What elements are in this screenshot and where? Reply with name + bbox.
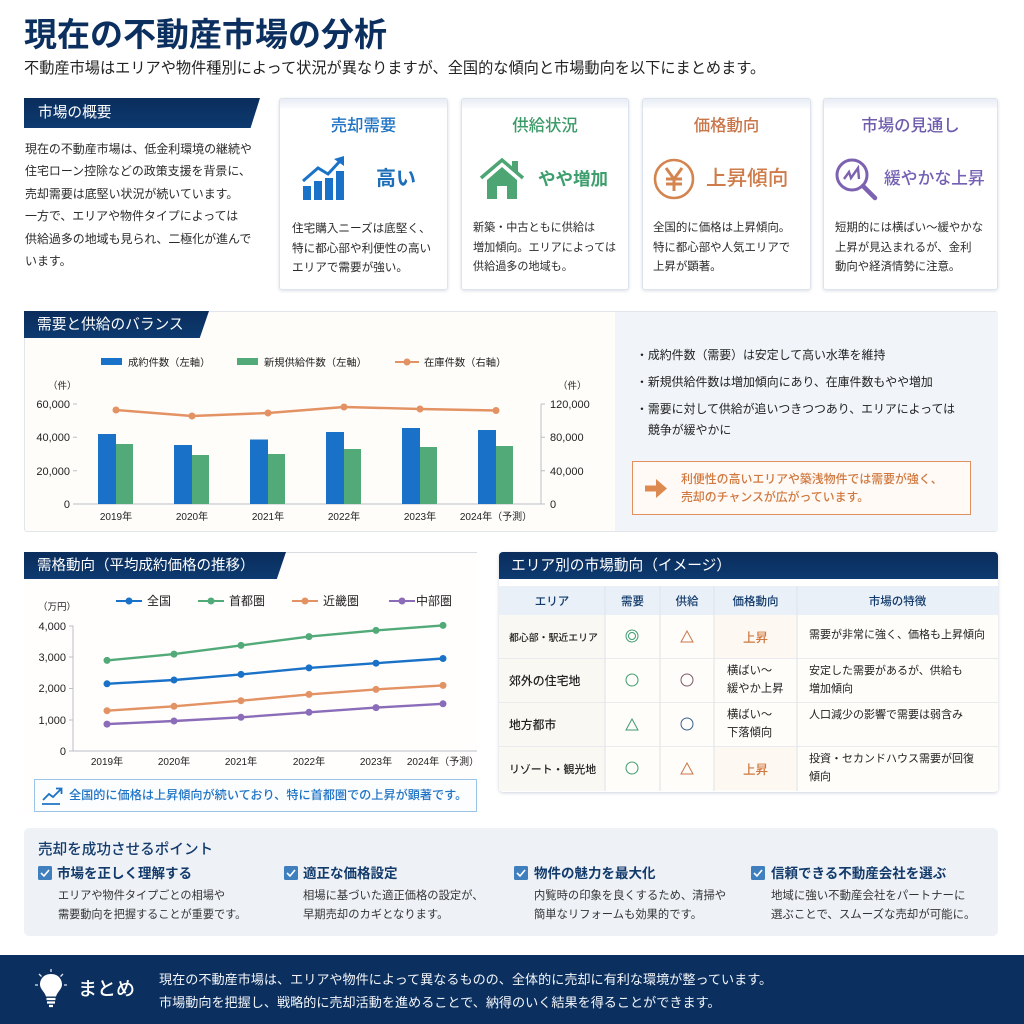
table row: resorts [509, 752, 974, 783]
table header row: 価格動向 [732, 596, 778, 608]
axis labels: 4,000 [38, 621, 66, 633]
table body tint [499, 615, 998, 791]
point: reliable agent [751, 866, 976, 920]
icon: arrow [645, 479, 667, 498]
axis labels: 20,000 [36, 466, 70, 478]
heading: area table [499, 552, 998, 579]
icon: checkbox [514, 866, 528, 880]
text: market overview body: 現在の不動産市場は、低金利環境の継続や [25, 142, 252, 156]
callout text [681, 472, 943, 504]
card body: 短期的には横ばい～緩やかな [835, 222, 983, 234]
table column lines [604, 586, 798, 791]
axis labels: （件） [558, 380, 587, 392]
card: price trend [642, 98, 811, 290]
legend: 成約件数（左軸） [128, 356, 210, 369]
axis labels: 3,000 [38, 652, 66, 664]
legend: 近畿圏 [323, 594, 359, 608]
panel: price trend chart [24, 552, 477, 813]
chart: average price lines: 2020年 [158, 755, 190, 768]
icon: checkbox [38, 866, 52, 880]
axis labels: 120,000 [550, 399, 590, 411]
heading: demand and supply [24, 311, 209, 338]
card body [653, 221, 790, 273]
axes and ticks [73, 404, 545, 504]
callout: selling opportunity [632, 461, 971, 515]
point: reliable agent: 選ぶことで、スムーズな売却が可能に。 [771, 908, 976, 920]
bullet list: ・需要に対して供給が追いつきつつあり、エリアによっては [636, 402, 955, 416]
legend: 全国 [147, 594, 171, 608]
summary text: 現在の不動産市場は、エリアや物件によって異なるものの、全体的に売却に有利な環境が整っています。 [159, 972, 772, 987]
point: maximize appeal: 物件の魅力を最大化 [534, 866, 656, 881]
bars: closed deals [98, 428, 496, 504]
card body [835, 221, 983, 273]
axis labels: 80,000 [550, 432, 584, 444]
table row: city center [499, 615, 998, 659]
value: rising: 上昇傾向 [706, 167, 788, 190]
panel: summary footer [0, 955, 1024, 1024]
table row: regional cities: 下落傾向 [727, 727, 772, 739]
symbol: triangle [625, 718, 639, 730]
table row: suburbs: 安定した需要があるが、供給も [809, 665, 963, 677]
line: inventory [112, 404, 500, 420]
axis labels: （万円） [38, 601, 76, 613]
card: supply [461, 98, 629, 290]
card title: 供給状況 [512, 117, 578, 135]
card body: 住宅購入ニーズは底堅く、 [292, 222, 431, 235]
value: slightly increasing: やや増加 [538, 169, 608, 189]
table row: regional cities: 地方都市 [509, 718, 556, 732]
heading: summary: まとめ [78, 979, 135, 1000]
summary text: 市場動向を把握し、戦略的に売却活動を進めることで、納得のいく結果を得ることができます。 [159, 995, 720, 1010]
table header row: 市場の特徴 [869, 596, 926, 608]
table row: city center: 都心部・駅近エリア [509, 632, 598, 644]
chart: average price lines: 2022年 [293, 755, 325, 768]
icon: light bulb [35, 969, 67, 1008]
heading: selling points: 売却を成功させるポイント [38, 842, 213, 858]
symbol: circle [680, 718, 694, 730]
legend [101, 356, 506, 369]
axis labels: （件） [48, 380, 77, 392]
panel: area market table [499, 552, 998, 792]
heading: market overview [24, 98, 260, 128]
axis labels [38, 601, 76, 758]
text: market overview body: 売却需要は底堅い状況が続いています。 [25, 187, 238, 201]
point: maximize appeal: 内覧時の印象を良くするため、清掃や [534, 890, 726, 902]
table row: resorts: 投資・セカンドハウス需要が回復 [809, 753, 974, 765]
point: appropriate pricing: 適正な価格設定 [303, 866, 398, 881]
icon: magnifier with chart [836, 158, 878, 200]
table row: suburbs: 郊外の住宅地 [509, 674, 580, 688]
heading: demand and supply: 需要と供給のバランス [37, 317, 184, 333]
point: appropriate pricing [284, 866, 484, 920]
table row: suburbs [499, 659, 998, 703]
bullet list: 競争が緩やかに [648, 423, 731, 437]
axis labels: 0 [550, 499, 556, 511]
icon: checkbox [284, 866, 298, 880]
chart: demand and supply bars with inventory line: 2024年（予測） [460, 510, 532, 523]
text: market overview body: 一方で、エリアや物件タイプによっては [25, 209, 238, 223]
table row: resorts: 上昇 [743, 763, 768, 777]
bullet list: ・新規供給件数は増加傾向にあり、在庫件数もやや増加 [636, 374, 933, 388]
legend: 在庫件数（右軸） [424, 356, 506, 369]
subtitle: 不動産市場はエリアや物件種別によって状況が異なりますが、全国的な傾向と市場動向を以下にまとめます。 [24, 60, 765, 77]
table row: regional cities [499, 703, 998, 747]
callout text: 利便性の高いエリアや築浅物件では需要が強く、 [681, 472, 943, 486]
point: reliable agent: 信頼できる不動産会社を選ぶ [771, 866, 946, 881]
icon: checkbox [751, 866, 765, 880]
text: market overview body: 供給過多の地域も見られ、二極化が進んで [25, 232, 251, 246]
table row: city center: 需要が非常に強く、価格も上昇傾向 [809, 629, 985, 641]
line: chubu [104, 700, 446, 728]
card body: 上昇が顕著。 [653, 261, 722, 273]
card body: 上昇が見込まれるが、金利 [835, 242, 971, 254]
table row: regional cities: 人口減少の影響で需要は弱含み [809, 709, 963, 721]
axis labels [36, 380, 590, 511]
symbol: double circle [626, 630, 638, 642]
card body: 新築・中古ともに供給は [473, 222, 595, 234]
table row: resorts: 傾向 [809, 771, 831, 783]
axis labels: 40,000 [550, 466, 584, 478]
symbol: circle [680, 674, 694, 686]
symbol: triangle [680, 762, 694, 774]
chart: average price lines: 2021年 [225, 755, 257, 768]
table row: suburbs: 増加傾向 [809, 683, 853, 695]
point: appropriate pricing: 相場に基づいた適正価格の設定が、 [303, 890, 484, 902]
card title: 価格動向 [694, 117, 759, 135]
summary text [159, 972, 772, 1010]
chart: average price lines: 2019年 [91, 755, 123, 768]
card title: 市場の見通し [861, 117, 960, 135]
table header row: 供給 [676, 596, 698, 608]
callout text: 全国的に価格は上昇傾向が続いており、特に首都圏での上昇が顕著です。 [69, 788, 467, 802]
icon: rising bar chart [302, 156, 344, 200]
card body: 特に都心部や人気エリアで [653, 242, 790, 254]
panel: selling points background [24, 828, 998, 936]
legend [116, 593, 452, 608]
first column shading [499, 615, 605, 791]
right summary background [615, 312, 998, 531]
point: understand the market: 市場を正しく理解する [57, 866, 192, 881]
point: appropriate pricing: 早期売却のカギとなります。 [303, 908, 448, 920]
table row: city center: 上昇 [743, 631, 768, 645]
point: maximize appeal: 簡単なリフォームも効果的です。 [534, 908, 702, 920]
table row: regional cities: 横ばい～ [727, 709, 772, 721]
point: reliable agent: 地域に強い不動産会社をパートナーに [771, 890, 965, 902]
heading: price trend [24, 552, 286, 579]
title: 現在の不動産市場の分析 [24, 16, 387, 53]
axis labels: 0 [64, 499, 70, 511]
chart: average price lines: 2023年 [360, 755, 392, 768]
icon: house [480, 158, 524, 199]
legend: 中部圏 [416, 593, 452, 608]
heading: market overview: 市場の概要 [38, 105, 111, 121]
value: high: 高い [376, 168, 416, 190]
text: market overview body: 住宅ローン控除などの政策支援を背景に、 [25, 164, 251, 178]
heading: area table: エリア別の市場動向（イメージ） [511, 558, 731, 574]
table header row [499, 586, 998, 615]
axis labels: 2,000 [38, 683, 66, 695]
value: moderate rise: 緩やかな上昇 [884, 169, 985, 188]
point: understand the market: エリアや物件タイプごとの相場や [58, 890, 225, 902]
chart: demand and supply bars with inventory line: 2021年 [252, 510, 284, 523]
table row: resorts: リゾート・観光地 [509, 764, 596, 776]
chart: demand and supply bars with inventory line: 2022年 [328, 510, 360, 523]
point: understand the market [38, 866, 246, 920]
icon: yen coin [654, 158, 694, 200]
card body [292, 222, 431, 274]
axis labels: 60,000 [36, 399, 70, 411]
line: kinki [104, 682, 446, 714]
table row: suburbs: 横ばい～ [727, 665, 772, 677]
table header row: エリア [535, 596, 569, 608]
chart: demand and supply bars with inventory line: 2023年 [404, 510, 436, 523]
panel: market overview [24, 98, 260, 268]
card body: エリアで需要が強い。 [292, 261, 408, 274]
card body: 供給過多の地域も。 [473, 261, 573, 273]
card body: 特に都心部や利便性の高い [292, 242, 431, 255]
symbol: circle [626, 762, 638, 774]
bullet list: ・成約件数（需要）は安定して高い水準を維持 [636, 348, 885, 362]
legend: 首都圏 [229, 594, 265, 608]
bars: new supply [116, 444, 513, 504]
card title: 売却需要 [331, 117, 396, 135]
line: capital region [104, 622, 446, 664]
axis labels: 1,000 [38, 715, 66, 727]
axis labels: 40,000 [36, 432, 70, 444]
panel: demand and supply balance [24, 311, 998, 532]
point: maximize appeal [514, 866, 726, 920]
chart: demand and supply bars with inventory line: 2020年 [176, 510, 208, 523]
table header row: 需要 [621, 596, 644, 608]
axis labels: 0 [60, 746, 66, 758]
card body: 動向や経済情勢に注意。 [835, 261, 960, 273]
heading: price trend: 需格動向（平均成約価格の推移） [37, 558, 254, 574]
card body [473, 221, 616, 273]
text: market overview body [25, 142, 252, 268]
chart: average price lines: 2024年（予測） [407, 755, 479, 768]
callout: price trend summary [34, 779, 477, 812]
legend: 新規供給件数（左軸） [264, 356, 367, 369]
text: market overview body: います。 [25, 254, 72, 268]
symbol: circle [626, 674, 638, 686]
table row: suburbs: 緩やか上昇 [727, 683, 784, 695]
icon: trend line [42, 788, 62, 805]
symbol: triangle [680, 630, 694, 642]
card: outlook [823, 98, 998, 290]
bullet list [636, 348, 955, 437]
axes [69, 626, 477, 751]
card body: 全国的に価格は上昇傾向。 [653, 222, 790, 234]
chart: demand and supply bars with inventory line: 2019年 [100, 510, 132, 523]
point: understand the market: 需要動向を把握することが重要です。 [58, 908, 246, 920]
line: national [104, 655, 446, 687]
callout text: 売却のチャンスが広がっています。 [681, 490, 869, 504]
card: sale demand [279, 98, 448, 290]
card body: 増加傾向。エリアによっては [473, 242, 616, 254]
